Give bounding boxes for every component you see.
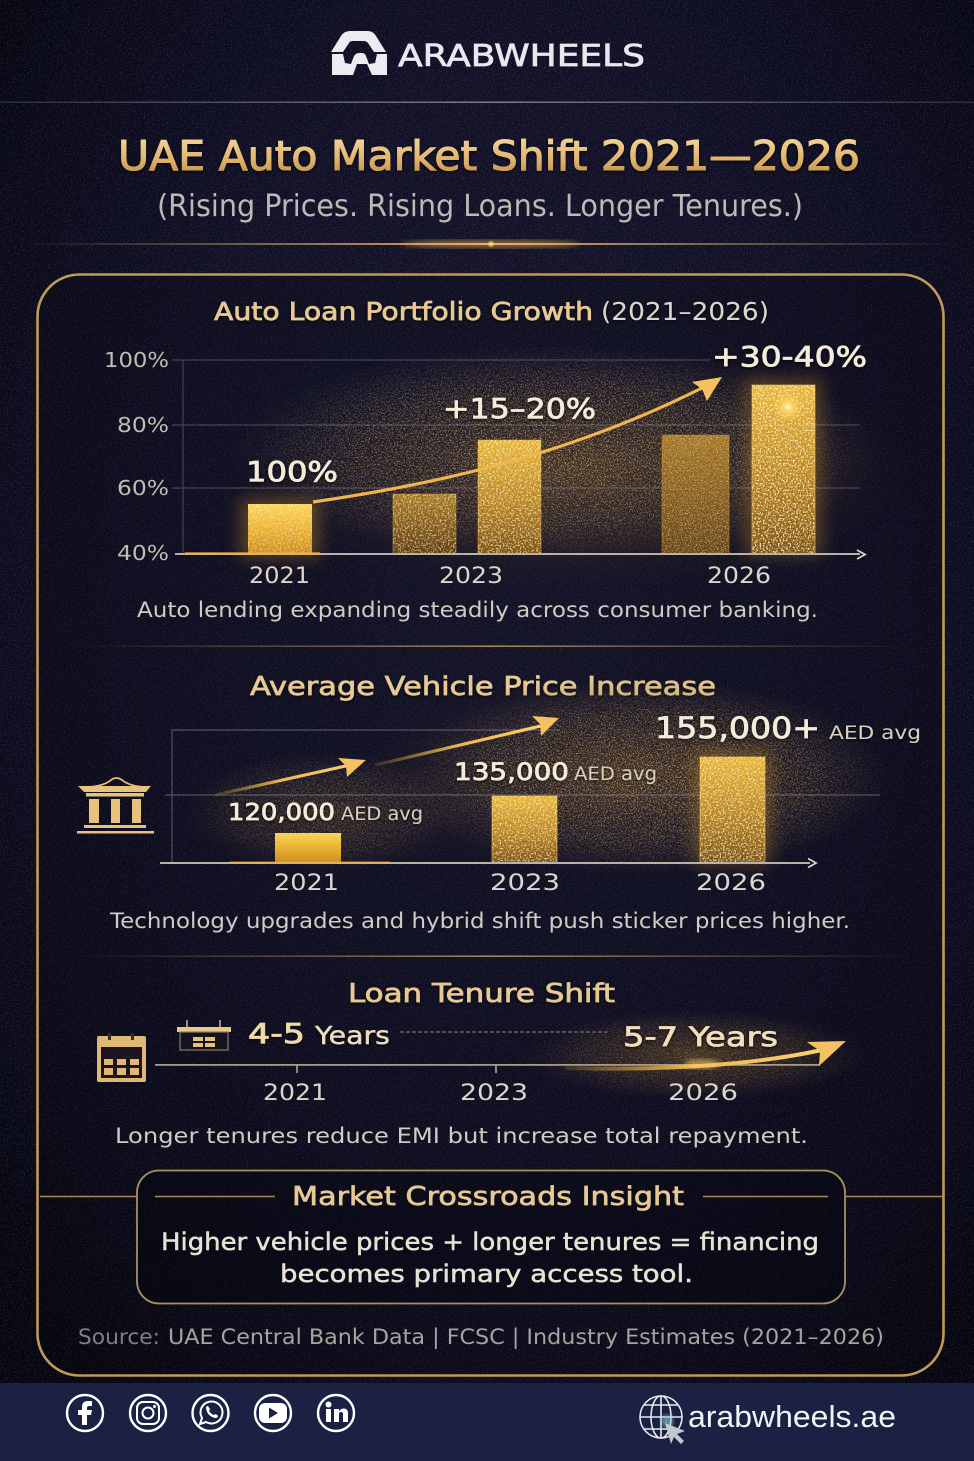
value: 155,000+ xyxy=(655,711,921,745)
source line: Source: xyxy=(78,1325,160,1349)
values: 100% xyxy=(246,455,338,488)
callout body: becomes primary access tool. xyxy=(280,1260,693,1288)
wordmark: ARABWHEELS xyxy=(398,39,645,74)
value: 135,000: 135,000 xyxy=(454,758,569,786)
callout heading: Market Crossroads Insight xyxy=(292,1182,684,1212)
label: 4-5 years: 4-5 xyxy=(248,1017,305,1050)
value: 155,000+: 155,000+ xyxy=(655,711,820,745)
source line: UAE Central Bank Data | FCSC | Industry Estimates (2021–2026) xyxy=(168,1325,884,1350)
callout: market crossroads insight xyxy=(40,1170,942,1304)
icon: car logo xyxy=(331,31,387,75)
year labels: 2021 xyxy=(274,871,339,896)
caption: Longer tenures reduce EMI but increase total repayment. xyxy=(115,1124,808,1148)
arrow: growth curve xyxy=(313,377,722,502)
y axis labels: 40% xyxy=(117,541,169,565)
icon: whatsapp xyxy=(192,1395,228,1431)
title: UAE Auto Market Shift 2021—2026 xyxy=(118,132,860,180)
year labels: 2023 xyxy=(439,564,503,589)
axis xyxy=(175,550,865,559)
y axis labels: 80% xyxy=(117,413,169,437)
value: 135,000: AED avg xyxy=(574,763,657,785)
year labels xyxy=(274,871,766,896)
icon: globe with cursor xyxy=(640,1396,685,1444)
arrow: price rise 2 xyxy=(375,716,559,765)
year labels: 2026 xyxy=(707,564,771,589)
label: 4-5 years xyxy=(248,1017,390,1050)
arrow: tenure extension xyxy=(565,1041,846,1069)
timeline xyxy=(155,1064,820,1073)
year labels: 2023 xyxy=(460,1081,528,1106)
year labels: 2026 xyxy=(668,1081,738,1106)
bars xyxy=(240,378,823,558)
logo: ARABWHEELS xyxy=(331,31,645,75)
warm haze behind 5-7 years xyxy=(530,1010,870,1100)
label: 5-7 years: 5-7 Years xyxy=(623,1022,778,1053)
y axis labels: 60% xyxy=(117,476,169,500)
website: arabwheels.ae xyxy=(688,1399,896,1434)
icon: facebook xyxy=(67,1395,103,1431)
year labels: 2026 xyxy=(696,871,766,896)
callout body xyxy=(161,1228,819,1288)
heading: (2021–2026) xyxy=(601,297,769,326)
panel: average vehicle price increase xyxy=(77,672,921,933)
value: 120,000 xyxy=(228,800,423,826)
value: 155,000+: AED avg xyxy=(829,722,921,744)
icon: small calendar xyxy=(177,1020,231,1050)
panel: main card xyxy=(38,274,944,1376)
icon: youtube xyxy=(255,1395,291,1431)
heading xyxy=(214,297,769,326)
values: +30-40% xyxy=(712,340,867,373)
year labels xyxy=(263,1081,738,1106)
caption: Technology upgrades and hybrid shift push sticker prices higher. xyxy=(109,909,850,933)
year labels xyxy=(249,564,771,589)
heading: Loan Tenure Shift xyxy=(348,979,615,1009)
header divider xyxy=(20,240,954,248)
y axis labels: 100% xyxy=(104,348,169,372)
subtitle: (Rising Prices. Rising Loans. Longer Tenures.) xyxy=(157,189,803,224)
footer bar xyxy=(0,1383,974,1461)
heading: Average Vehicle Price Increase xyxy=(250,672,716,702)
panel: auto loan portfolio growth xyxy=(104,297,910,622)
icon: large calendar xyxy=(97,1033,146,1082)
label: 4-5 years: Years xyxy=(314,1021,390,1050)
panel: loan tenure shift xyxy=(97,979,870,1148)
heading: Auto Loan Portfolio Growth xyxy=(214,297,593,326)
year labels: 2021 xyxy=(263,1081,327,1106)
caption: Auto lending expanding steadily across consumer banking. xyxy=(137,598,818,622)
axis xyxy=(160,858,816,868)
icon: bank xyxy=(77,778,154,834)
icon: linkedin xyxy=(318,1395,354,1431)
value: 120,000: AED avg xyxy=(341,803,423,825)
y axis labels xyxy=(104,348,169,565)
year labels: 2023 xyxy=(490,871,560,896)
dashed connector xyxy=(400,1031,610,1033)
value: 135,000 xyxy=(454,758,657,786)
callout body: Higher vehicle prices + longer tenures = financing xyxy=(161,1228,819,1256)
bars xyxy=(275,750,772,865)
bar chart: loan growth xyxy=(104,340,910,590)
icon: instagram xyxy=(130,1395,166,1431)
values xyxy=(246,340,867,488)
bar chart: vehicle price xyxy=(160,675,921,896)
arrow: price rise 1 xyxy=(215,758,366,795)
value: 120,000: 120,000 xyxy=(228,800,335,826)
year labels: 2021 xyxy=(249,564,310,589)
values: +15–20% xyxy=(443,392,596,425)
